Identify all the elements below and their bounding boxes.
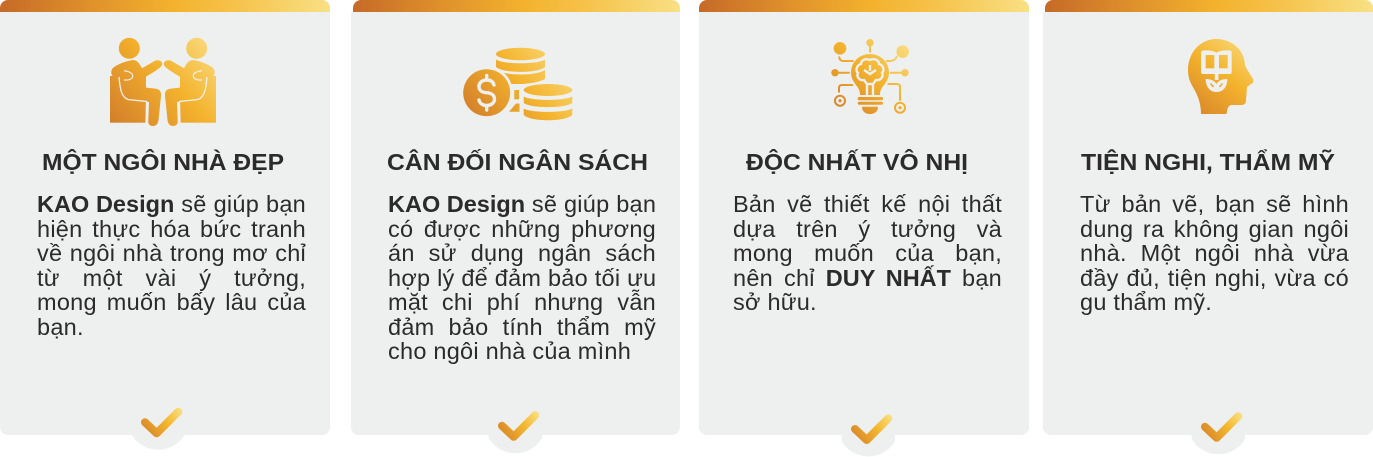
text block: Từ bản vẽ, bạn sẽ hình bbox=[1080, 191, 1349, 217]
text block: bạn. bbox=[37, 314, 84, 340]
card background bbox=[351, 12, 680, 435]
text block bbox=[733, 191, 1002, 315]
text block: mong muốn của bạn, bbox=[733, 240, 1002, 266]
icon: check badge bbox=[842, 414, 895, 456]
text block bbox=[388, 191, 656, 364]
heading: ĐỘC NHẤT VÔ NHỊ bbox=[746, 148, 968, 175]
text block: cho ngôi nhà của mình bbox=[388, 338, 631, 364]
text block: mặt chi phí nhưng vẫn bbox=[388, 289, 656, 315]
text block bbox=[1080, 191, 1349, 315]
icon: two people talking bbox=[110, 38, 216, 126]
heading: CÂN ĐỐI NGÂN SÁCH bbox=[387, 148, 648, 175]
icon: light bulb with brain bbox=[831, 39, 909, 114]
text block: Bản vẽ thiết kế nội thất bbox=[733, 191, 1002, 217]
text block: dung ra không gian ngôi bbox=[1080, 216, 1349, 242]
heading: TIỆN NGHI, THẨM MỸ bbox=[1081, 148, 1335, 175]
text block: nên chỉ DUY NHẤT bạn bbox=[733, 264, 1002, 290]
card background bbox=[1043, 12, 1373, 435]
panel: độc nhất vô nhị bbox=[699, 0, 1029, 456]
icon: check badge bbox=[1192, 412, 1245, 454]
text block: về ngôi nhà trong mơ chỉ bbox=[37, 240, 306, 266]
heading: MỘT NGÔI NHÀ ĐẸP bbox=[42, 148, 284, 175]
text block: đầy đủ, tiện nghi, vừa có bbox=[1080, 264, 1349, 290]
icon: head with book and plant bbox=[1188, 39, 1254, 114]
card background bbox=[0, 12, 330, 435]
icon: coins and dollar bbox=[463, 48, 572, 120]
top gradient bar bbox=[699, 0, 1029, 12]
text block bbox=[37, 191, 306, 340]
text block: mong muốn bấy lâu của bbox=[37, 289, 306, 315]
text block: KAO Design sẽ giúp bạn bbox=[388, 191, 656, 217]
text block: dựa trên ý tưởng và bbox=[733, 216, 1002, 242]
text block: hiện thực hóa bức tranh bbox=[37, 216, 306, 242]
panel: tiện nghi, thẩm mỹ bbox=[1043, 0, 1373, 454]
top gradient bar bbox=[353, 0, 680, 12]
text block: KAO Design sẽ giúp bạn bbox=[37, 191, 306, 217]
panel: cân đối ngân sách bbox=[351, 0, 680, 453]
panel: một ngôi nhà đẹp bbox=[0, 0, 330, 450]
top gradient bar bbox=[1045, 0, 1373, 12]
icon: check badge bbox=[488, 411, 542, 453]
text block: từ một vài ý tưởng, bbox=[37, 264, 306, 290]
text block: sở hữu. bbox=[733, 289, 817, 315]
text block: gu thẩm mỹ. bbox=[1080, 289, 1212, 315]
text block: nhà. Một ngôi nhà vừa bbox=[1080, 240, 1349, 266]
card background bbox=[699, 12, 1029, 435]
text block: án sử dụng ngân sách bbox=[388, 240, 656, 266]
top gradient bar bbox=[0, 0, 330, 12]
text block: hợp lý để đảm bảo tối ưu bbox=[388, 264, 656, 290]
icon: check badge bbox=[132, 408, 184, 450]
text block: có được những phương bbox=[388, 216, 656, 242]
text block: đảm bảo tính thẩm mỹ bbox=[388, 314, 656, 340]
